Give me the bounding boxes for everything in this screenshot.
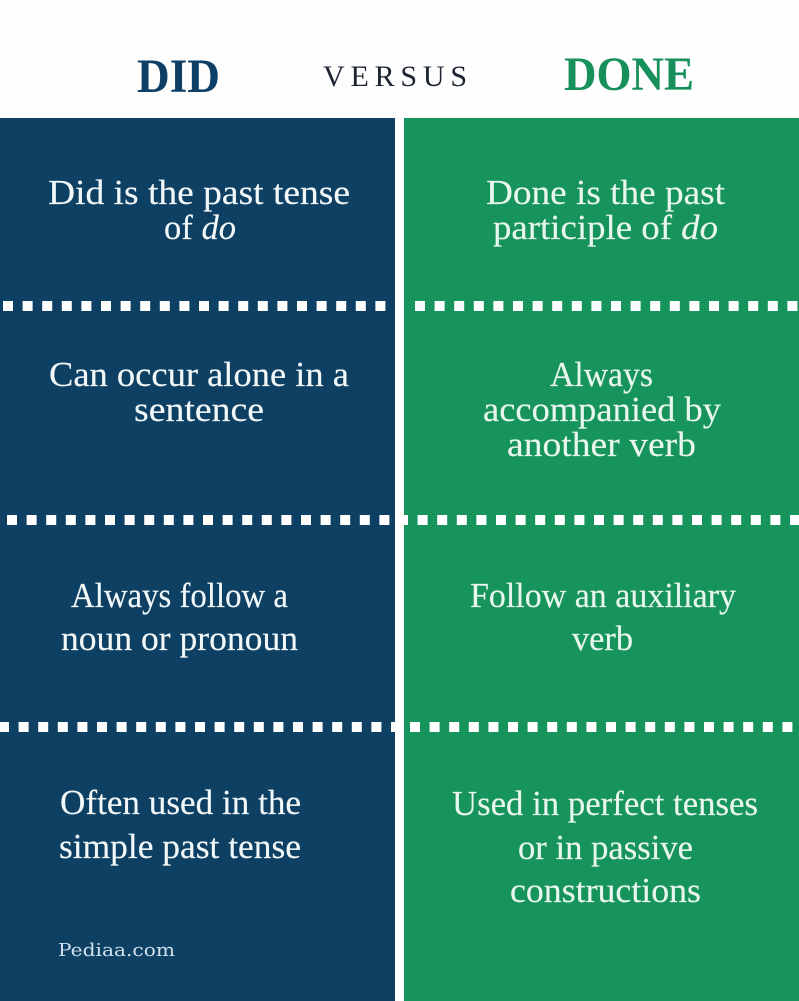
text: did row 2 bbox=[49, 356, 349, 429]
text: did row 2: sentence bbox=[134, 391, 264, 429]
text: did row 1 bbox=[48, 174, 350, 247]
text: done row 3: verb bbox=[572, 620, 633, 658]
text: done row 4 bbox=[452, 785, 758, 910]
text: did row 3 bbox=[61, 577, 298, 658]
text: done row 2: accompanied by bbox=[483, 391, 722, 429]
text: did row 3: Always follow a bbox=[71, 577, 288, 615]
panel: done column bbox=[398, 118, 799, 1001]
text: done row 1: participle of do bbox=[493, 209, 718, 247]
text: did row 1: Did is the past tense bbox=[48, 174, 350, 212]
text: done row 4: Used in perfect tenses bbox=[452, 785, 758, 823]
text: did row 4 bbox=[59, 784, 301, 866]
text: done row 3 bbox=[470, 577, 737, 658]
title: DID: DID bbox=[137, 50, 220, 103]
text: done row 4: or in passive bbox=[518, 829, 693, 867]
divider row 3 left bbox=[0, 722, 401, 732]
text: did row 4: Often used in the bbox=[60, 784, 301, 822]
text: done row 2 bbox=[483, 356, 722, 464]
text: done row 1 bbox=[486, 174, 725, 247]
text: done row 4: constructions bbox=[510, 872, 701, 910]
divider row 1 right bbox=[415, 301, 797, 311]
title: VERSUS: VERSUS bbox=[323, 60, 467, 93]
divider row 3 right bbox=[410, 722, 792, 732]
text: did row 1: of do bbox=[164, 209, 236, 247]
text: did row 4: simple past tense bbox=[59, 828, 301, 866]
text: did row 3: noun or pronoun bbox=[61, 620, 298, 658]
text: did row 2: Can occur alone in a bbox=[49, 356, 349, 394]
logo: Pediaa.com: Pediaa.com bbox=[58, 940, 175, 961]
divider row 2 left bbox=[7, 515, 389, 525]
divider row 1 left bbox=[3, 301, 385, 311]
text: done row 3: Follow an auxiliary bbox=[470, 577, 737, 615]
divider row 2 right bbox=[398, 515, 799, 525]
panel: did column bbox=[0, 118, 401, 1001]
text: done row 2: another verb bbox=[507, 426, 696, 464]
text: done row 1: Done is the past bbox=[486, 174, 725, 212]
text: done row 2: Always bbox=[550, 356, 653, 394]
title: DONE: DONE bbox=[564, 48, 694, 101]
